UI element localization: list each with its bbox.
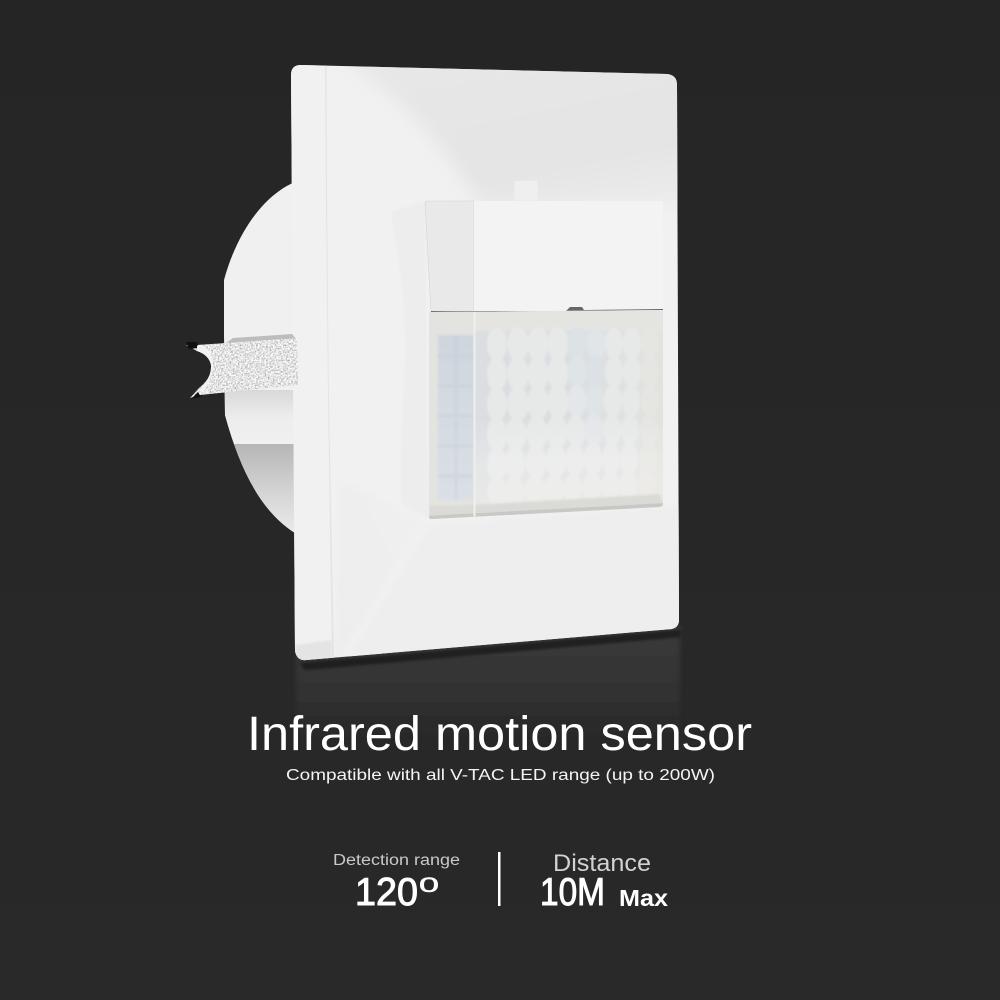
distance unit: Max	[619, 885, 668, 911]
degree mark: 0	[419, 874, 439, 897]
mounting tab	[514, 180, 538, 201]
floor contact shadow	[300, 630, 680, 670]
lens facets	[488, 330, 640, 478]
rear housing	[224, 184, 294, 532]
divider	[498, 852, 500, 906]
plate upper facet	[347, 66, 678, 204]
lens left panel	[434, 312, 474, 496]
product photo: motion sensor	[186, 55, 695, 670]
plate lower-right facet	[348, 505, 679, 656]
detection range value: 120	[355, 871, 418, 914]
lens warm highlight	[476, 462, 663, 504]
metal clip	[186, 334, 298, 399]
distance label: Distance	[553, 850, 651, 877]
sensor body	[425, 201, 663, 313]
lens	[425, 305, 665, 525]
stat: detection range	[333, 852, 460, 914]
distance value: 10M	[540, 871, 605, 914]
front plate	[285, 55, 695, 670]
plate left edge	[291, 65, 332, 660]
lens top band	[434, 310, 660, 330]
plate lower-left facet	[338, 657, 339, 658]
title: Infrared motion sensor	[247, 708, 752, 761]
sensor shadow wedge	[391, 201, 429, 518]
stat: distance	[540, 850, 668, 914]
subtitle: Compatible with all V-TAC LED range (up to 200W)	[286, 767, 715, 784]
detection range label: Detection range	[333, 852, 460, 869]
floor reflection	[296, 625, 680, 735]
lens bottom band	[430, 494, 663, 516]
infographic canvas	[186, 65, 752, 906]
lens corner edge	[474, 312, 476, 522]
